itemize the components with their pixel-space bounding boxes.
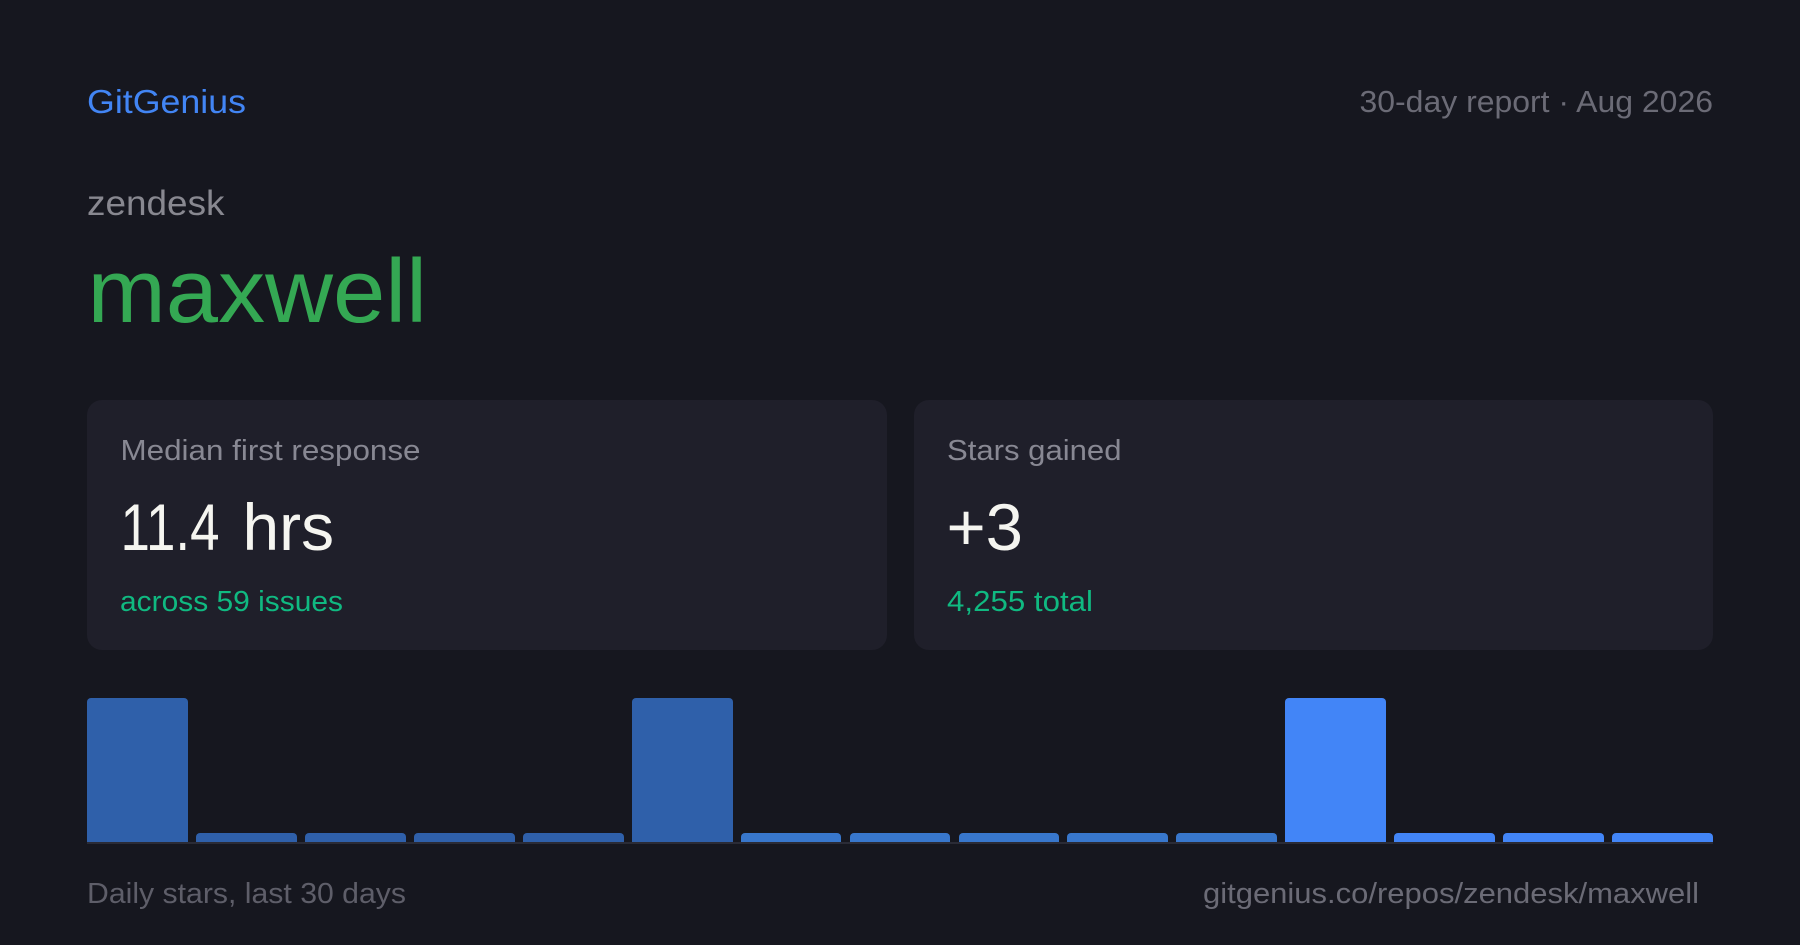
note: 4,255 total: 4,255 total xyxy=(947,586,1093,618)
header: report period: 30-day report · Aug 2026 xyxy=(1360,84,1713,119)
repository name: maxwell xyxy=(88,242,427,342)
label: median first response: Median first response xyxy=(120,435,420,467)
panel: median first response xyxy=(87,400,887,650)
label: stars gained: Stars gained xyxy=(947,435,1122,467)
repository owner: zendesk xyxy=(87,184,225,223)
header: brand: GitGenius xyxy=(87,83,246,120)
panel: stars gained xyxy=(914,400,1713,650)
bar chart: daily stars xyxy=(87,698,1713,844)
chart caption: Daily stars, last 30 days xyxy=(87,878,406,910)
repository url: gitgenius.co/repos/zendesk/maxwell xyxy=(1203,878,1699,910)
note: across 59 issues: across 59 issues xyxy=(120,586,343,618)
value: 11.4 hrs: 11.4 xyxy=(120,490,220,564)
value: +3: +3 xyxy=(946,490,1023,564)
value: 11.4 hrs xyxy=(120,490,334,564)
value: 11.4 hrs: hrs xyxy=(242,490,334,564)
